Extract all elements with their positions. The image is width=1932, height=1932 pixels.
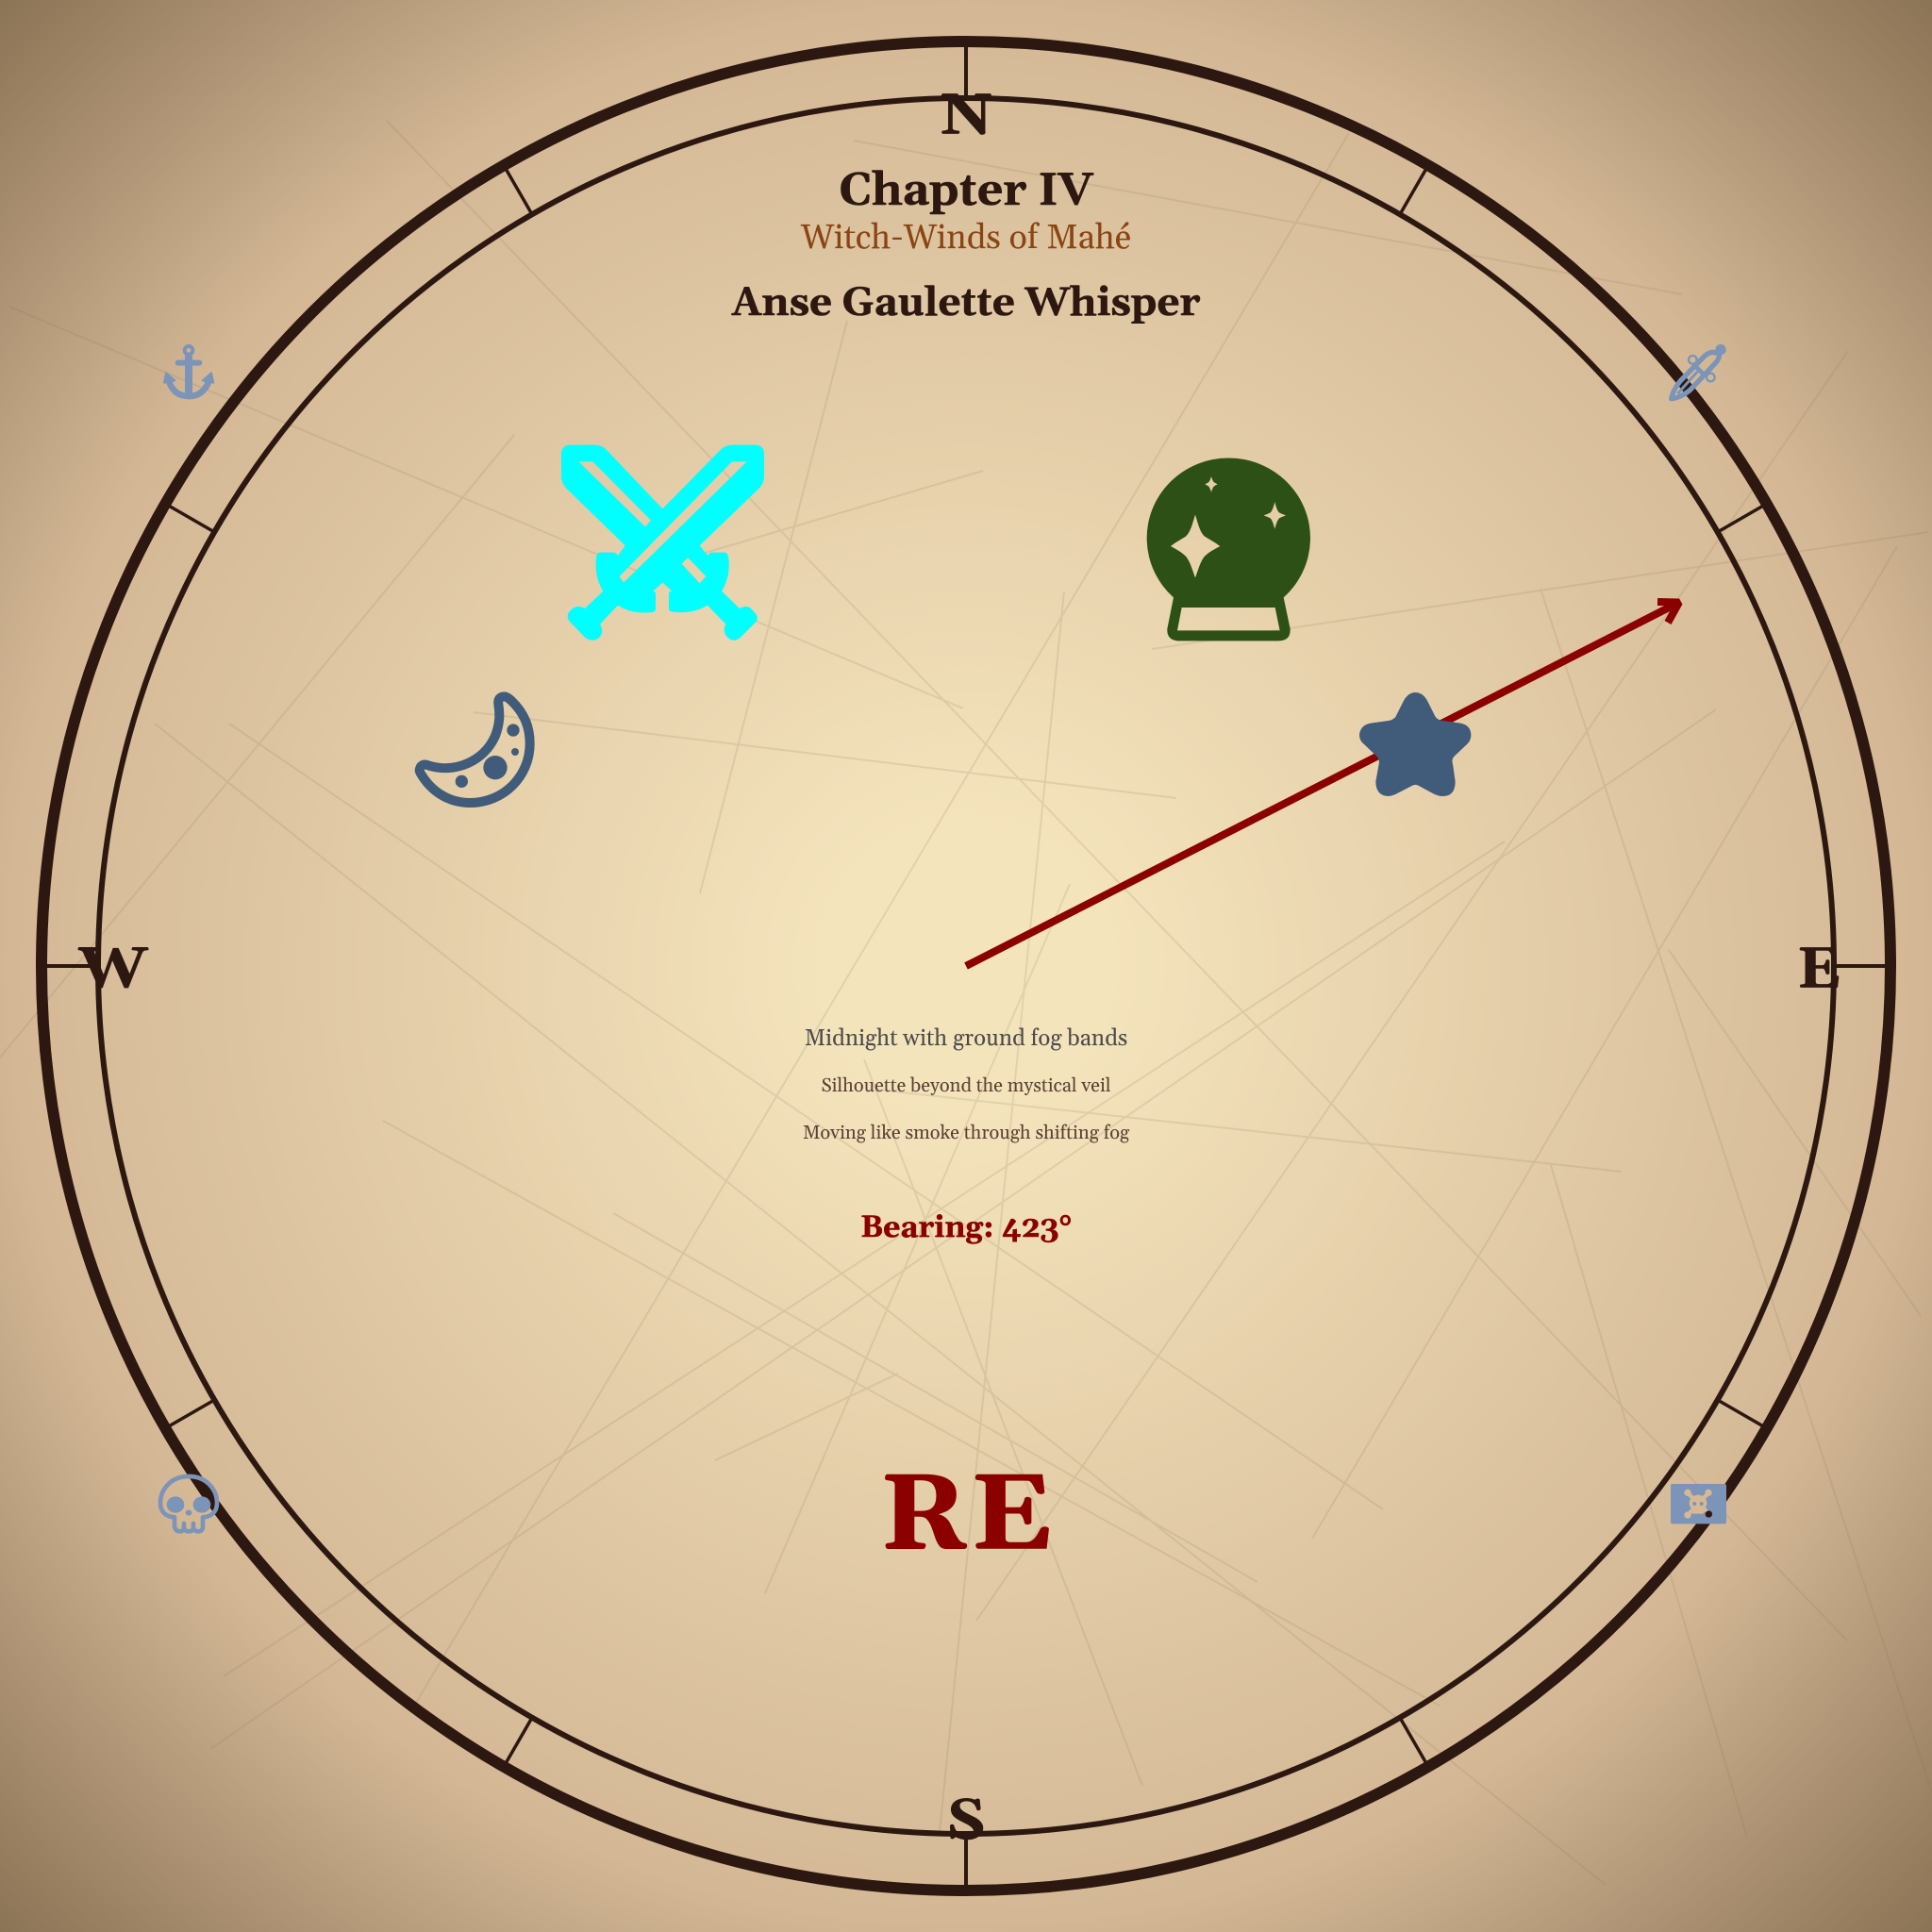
chapter subtitle: Witch-Winds of Mahé [800,218,1131,260]
arrow shaft [966,604,1675,966]
icon: rounded star [1359,692,1471,796]
east: E [1797,935,1840,1008]
icon: crescent moon [420,696,530,803]
bearing arrow [966,602,1679,966]
intermediate ticks [165,165,1767,1767]
arrow head [1657,602,1679,623]
weather line: Midnight with ground fog bands [805,1025,1127,1054]
west: W [77,935,149,1008]
icon: anchor [164,346,213,398]
bearing label: Bearing: 423° [860,1208,1072,1247]
south: S [946,1786,986,1858]
icon: dagger [1672,344,1726,399]
icon: crossed swords [561,445,764,641]
silhouette line: Silhouette beyond the mystical veil [821,1074,1111,1098]
movement line: Moving like smoke through shifting fog [803,1121,1130,1145]
description block [803,1025,1130,1145]
icon: skull [160,1476,217,1531]
icon: crystal ball [1147,458,1310,641]
chapter heading: Chapter IV [840,163,1094,221]
icon: pirate flag [1671,1484,1726,1524]
title block [731,163,1200,329]
RE monogram: RE [880,1451,1052,1585]
north: N [941,81,991,154]
location name: Anse Gaulette Whisper [731,279,1200,329]
